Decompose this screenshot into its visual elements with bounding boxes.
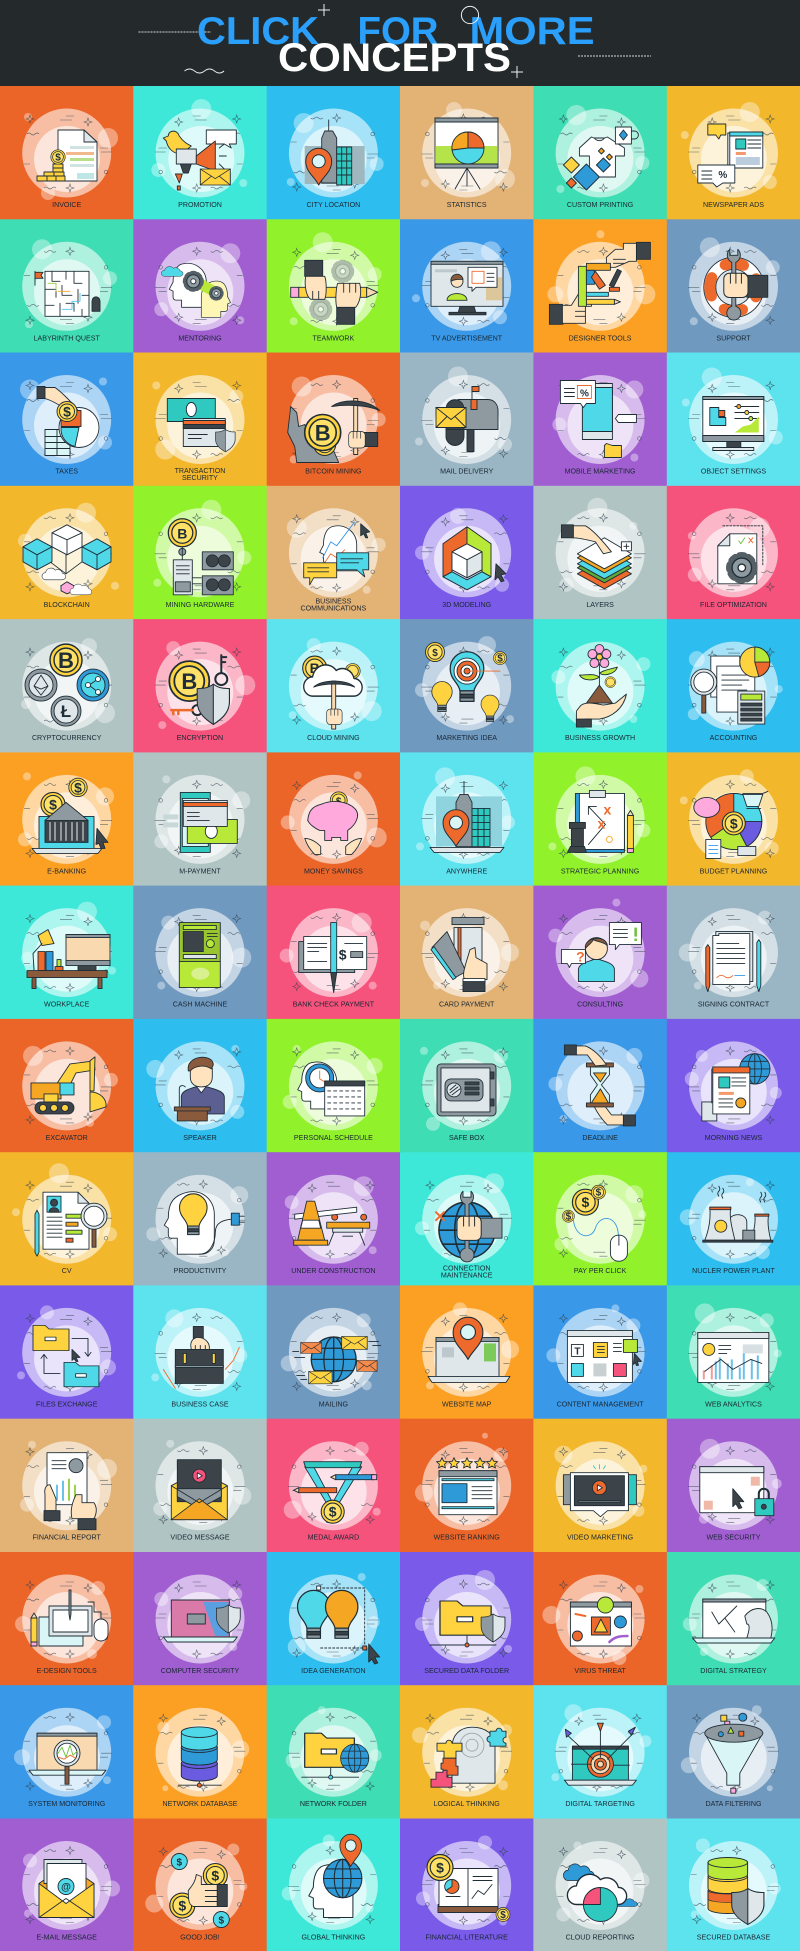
label: WEB SECURITY xyxy=(706,1534,761,1542)
panel: data filtering xyxy=(667,1685,800,1820)
panel: content management xyxy=(533,1285,668,1420)
label: COMPUTER SECURITY xyxy=(161,1667,239,1675)
icon: bank on laptop with coins: $ xyxy=(74,779,82,795)
panel: consulting xyxy=(533,886,668,1021)
panel: deadline xyxy=(533,1019,668,1154)
label: FILES EXCHANGE xyxy=(36,1400,98,1408)
label: VIDEO MARKETING xyxy=(567,1534,633,1542)
icon: mailbox with flag and letter xyxy=(436,386,498,452)
icon: globe, wrench and fist xyxy=(436,1191,502,1262)
label: BUDGET PLANNING xyxy=(700,867,767,875)
icon: open book with charts and coins xyxy=(427,1854,510,1922)
panel: excavator xyxy=(0,1019,135,1154)
panel: pay per click xyxy=(533,1152,668,1287)
panel: web security xyxy=(667,1419,800,1554)
icon: head with puzzle pieces xyxy=(431,1727,506,1787)
label: CONNECTION xyxy=(443,1265,491,1273)
panel: support xyxy=(667,219,800,354)
icon: analytics window xyxy=(698,1332,769,1382)
panel: newspaper ads xyxy=(667,86,800,221)
label: SYSTEM MONITORING xyxy=(28,1800,105,1808)
icon: excavator xyxy=(31,1057,106,1114)
panel: city location xyxy=(267,86,402,221)
panel: budget planning xyxy=(667,752,800,887)
panel: medal award xyxy=(267,1419,402,1554)
label: LOGICAL THINKING xyxy=(434,1800,500,1808)
icon: open book with charts and coins: $ xyxy=(500,1910,506,1921)
icon: thumbs up with coins xyxy=(170,1854,229,1928)
icon: medal with ribbons and pencils: $ xyxy=(329,1504,337,1520)
label: FINANCIAL LITERATURE xyxy=(426,1934,508,1942)
icon: two folders with arrows xyxy=(33,1325,99,1387)
panel: strategic planning xyxy=(533,752,668,887)
icon: hands holding a report xyxy=(44,1453,96,1530)
panel: speaker xyxy=(133,1019,268,1154)
label: FILE OPTIMIZATION xyxy=(700,601,767,609)
label: CARD PAYMENT xyxy=(439,1001,495,1009)
label: VIRUS THREAT xyxy=(574,1667,626,1675)
panel: files exchange xyxy=(0,1285,135,1420)
icon: laptop with plan and chess knight xyxy=(693,1599,775,1643)
icon: newspaper, globe and mug xyxy=(702,1054,770,1121)
panel: website map xyxy=(400,1285,535,1420)
panel: digital strategy xyxy=(667,1552,800,1687)
label: CASH MACHINE xyxy=(173,1001,227,1009)
panel: idea generation xyxy=(267,1552,402,1687)
label: WORKPLACE xyxy=(44,1001,90,1009)
icon: hand with bank cards xyxy=(431,918,487,992)
icon: file with gear xyxy=(718,526,763,584)
title: click for more: FOR xyxy=(358,10,438,53)
icon: envelope with e-mail letter: @ xyxy=(61,1882,71,1893)
label: NEWSPAPER ADS xyxy=(703,201,764,209)
panel: signing contract xyxy=(667,886,800,1021)
icon: bitcoin, keys and shield: B xyxy=(181,669,197,694)
panel: designer tools xyxy=(533,219,668,354)
label: CRYPTOCURRENCY xyxy=(32,734,102,742)
icon: laptop with shield xyxy=(163,1600,240,1642)
label: CLOUD REPORTING xyxy=(566,1934,635,1942)
icon: contract with pens xyxy=(706,932,761,992)
icon: monitor with presenter and bubble xyxy=(431,261,503,315)
panel: mail delivery xyxy=(400,352,535,488)
label: PROMOTION xyxy=(178,201,222,209)
label: MOBILE MARKETING xyxy=(565,468,636,476)
icon: newspaper, percent card and bubble: % xyxy=(718,170,727,181)
label: PERSONAL SCHEDULE xyxy=(294,1134,373,1142)
icon: hand stacking layers xyxy=(561,525,631,589)
icon: hands with design tools xyxy=(549,242,650,324)
icon: stacked database cylinders xyxy=(178,1727,221,1787)
label: DIGITAL TARGETING xyxy=(565,1800,635,1808)
label: ACCOUNTING xyxy=(710,734,757,742)
label: TAXES xyxy=(55,468,78,476)
label: TRANSACTION xyxy=(175,467,225,475)
icon: head with clock and calendar xyxy=(298,1062,365,1116)
label: NETWORK FOLDER xyxy=(300,1800,367,1808)
title: click for more: CLICK xyxy=(197,10,319,53)
panel: money savings xyxy=(267,752,402,887)
panel: virus threat xyxy=(533,1552,668,1687)
icon: globe with envelopes xyxy=(293,1336,381,1384)
icon: invoice document and coins: $ xyxy=(55,152,61,164)
icon: monitoring screen and magnifier xyxy=(29,1733,106,1784)
icon: bill, bank card and shield xyxy=(167,398,235,452)
panel: financial report xyxy=(0,1419,135,1554)
panel: bitcoin mining xyxy=(267,352,402,488)
panel: accounting xyxy=(667,619,800,754)
panel: e-banking xyxy=(0,752,135,887)
panel: good job xyxy=(133,1818,268,1951)
label: PAY PER CLICK xyxy=(574,1267,627,1275)
title: click for more: MORE xyxy=(470,10,594,53)
panel: business communications xyxy=(267,486,402,621)
icon: phone, card and cash xyxy=(163,792,237,852)
panel: promotion xyxy=(133,86,268,221)
title: click for more xyxy=(197,10,594,53)
label: DATA FILTERING xyxy=(706,1800,761,1808)
label: LAYERS xyxy=(586,601,614,609)
icon: clipboard with rook and pencil: x xyxy=(598,815,606,831)
icon: bank on laptop with coins: $ xyxy=(49,796,57,812)
label: SECURED DATA FOLDER xyxy=(424,1667,509,1675)
icon: bitcoin coin, tower and GPUs: B xyxy=(177,525,187,541)
panel: mobile marketing xyxy=(533,352,668,488)
icon: hand with growing flower xyxy=(576,645,626,727)
label: PRODUCTIVITY xyxy=(174,1267,227,1275)
label: ANYWHERE xyxy=(446,867,487,875)
icon: thumbs up with coins: $ xyxy=(177,1858,183,1868)
panel: morning news xyxy=(667,1019,800,1154)
icon: consultant with speech bubbles: ? xyxy=(576,949,585,965)
panel: cv xyxy=(0,1152,135,1287)
icon: bank on laptop with coins xyxy=(32,778,108,853)
panel: personal schedule xyxy=(267,1019,402,1154)
icon: city buildings and location pin xyxy=(305,120,365,185)
label: WEBSITE MAP xyxy=(442,1400,492,1408)
label: GLOBAL THINKING xyxy=(301,1934,365,1942)
panel: 3d modeling xyxy=(400,486,535,621)
icon: website window with five stars xyxy=(436,1458,498,1515)
label: MAILING xyxy=(319,1400,348,1408)
icon: open book with charts and coins: $ xyxy=(436,1860,444,1876)
panel: cloud mining xyxy=(267,619,402,754)
label: MARKETING IDEA xyxy=(436,734,497,742)
icon: map on laptop with pin xyxy=(428,1317,510,1382)
label: NUCLER POWER PLANT xyxy=(692,1267,776,1275)
panel: encryption xyxy=(133,619,268,754)
icon: two heads with gears xyxy=(161,263,231,317)
icon: four cryptocurrency coins: B xyxy=(58,648,74,673)
icon: coins and computer mouse xyxy=(562,1185,627,1261)
panel: video marketing xyxy=(533,1419,668,1554)
icon: rock, bitcoin and pickaxe: B xyxy=(315,420,331,446)
label: TEAMWORK xyxy=(313,334,355,342)
icon: target on laptop with arrows xyxy=(564,1723,636,1785)
panel: taxes xyxy=(0,352,135,488)
panel: blockchain xyxy=(0,486,135,621)
label: FINANCIAL REPORT xyxy=(33,1534,101,1542)
icon: clipboard with rook and pencil: x xyxy=(604,801,612,817)
label: UNDER CONSTRUCTION xyxy=(291,1267,376,1275)
label: WEBSITE RANKING xyxy=(434,1534,500,1542)
label: LABYRINTH QUEST xyxy=(34,334,100,342)
icon: clouds with pie chart xyxy=(563,1864,637,1922)
label: E-BANKING xyxy=(47,867,86,875)
panel: object settings xyxy=(667,352,800,488)
icon: bird, megaphone, envelope, speech bubble xyxy=(163,130,236,190)
panel: cloud reporting xyxy=(533,1818,668,1951)
label: CITY LOCATION xyxy=(307,201,360,209)
label: OBJECT SETTINGS xyxy=(701,468,766,476)
icon: head, globe and pin xyxy=(309,1834,362,1918)
label: MORNING NEWS xyxy=(705,1134,763,1142)
panel: business growth xyxy=(533,619,668,754)
label: BANK CHECK PAYMENT xyxy=(293,1001,375,1009)
icon: coins and computer mouse: $ xyxy=(596,1188,602,1199)
icon: hands holding hourglass xyxy=(564,1045,635,1126)
panel: statistics xyxy=(400,86,535,221)
label: E-DESIGN TOOLS xyxy=(37,1667,97,1675)
label: E-MAIL MESSAGE xyxy=(36,1934,97,1942)
panel: layers xyxy=(533,486,668,621)
panel: custom printing xyxy=(533,86,668,221)
label: SPEAKER xyxy=(183,1134,217,1142)
label line 2: MAINTENANCE xyxy=(441,1272,493,1280)
icon: ATM machine xyxy=(179,923,220,988)
panel: system monitoring xyxy=(0,1685,135,1820)
icon: desk with computer, lamp and binders xyxy=(27,930,110,989)
label: SIGNING CONTRACT xyxy=(698,1001,770,1009)
label: DIGITAL STRATEGY xyxy=(700,1667,767,1675)
panel: card payment xyxy=(400,886,535,1021)
icon: folder with shield on network xyxy=(430,1601,505,1647)
panel: cryptocurrency xyxy=(0,619,135,754)
label: BITCOIN MINING xyxy=(305,468,362,476)
icon: maze with flag and figure xyxy=(35,271,100,316)
panel: safe box xyxy=(400,1019,535,1154)
icon: four cryptocurrency coins xyxy=(25,644,109,726)
panel: mining hardware xyxy=(133,486,268,621)
label: 3D MODELING xyxy=(442,601,491,609)
icon: two bulbs with selection frame and cursor xyxy=(298,1586,380,1664)
panel: file optimization xyxy=(667,486,800,621)
panel: cash machine xyxy=(133,886,268,1021)
panel: connection maintenance xyxy=(400,1152,535,1287)
panel: financial literature xyxy=(400,1818,535,1951)
icon: check with fountain pen: $ xyxy=(339,947,347,963)
panel: m-payment xyxy=(133,752,268,887)
label: GOOD JOB! xyxy=(180,1934,220,1942)
label: MENTORING xyxy=(178,334,222,342)
icon: hand carrying briefcase xyxy=(163,1326,239,1388)
header decoration: dashed lines xyxy=(138,32,651,56)
icon: light bulbs, target and coins: $ xyxy=(432,648,438,659)
panel: secured data folder xyxy=(400,1552,535,1687)
icon: folder and globe on network xyxy=(302,1733,369,1779)
icon: coins and computer mouse: $ xyxy=(566,1212,572,1223)
panel: secured database xyxy=(667,1818,800,1951)
panel: productivity xyxy=(133,1152,268,1287)
icon: cubes, clouds and nodes xyxy=(23,525,111,595)
label: STRATEGIC PLANNING xyxy=(561,867,639,875)
icon: video player monitor xyxy=(563,1465,636,1517)
icon: safe xyxy=(437,1064,496,1116)
label: SUPPORT xyxy=(716,334,751,342)
icon: pie chart, coin, piggy and cart: $ xyxy=(730,815,738,831)
icon: t-shirt, mug and diamonds xyxy=(563,127,638,190)
panel: anywhere xyxy=(400,752,535,887)
icon: browser window with cursor and lock xyxy=(700,1467,774,1516)
icon: two hands holding a pencil xyxy=(291,260,378,324)
header decorations xyxy=(184,4,523,78)
label: DESIGNER TOOLS xyxy=(569,334,632,342)
icon: head with light bulb and plug xyxy=(164,1192,244,1254)
panel: mailing xyxy=(267,1285,402,1420)
panel: business case xyxy=(133,1285,268,1420)
label: M-PAYMENT xyxy=(179,867,221,875)
panel: nucler power plant xyxy=(667,1152,800,1287)
panel: network folder xyxy=(267,1685,402,1820)
header band xyxy=(0,0,800,87)
icon: light bulbs, target and coins: $ xyxy=(497,654,503,665)
label: SECURED DATABASE xyxy=(697,1934,770,1942)
icon: window with virus, warning and bugs xyxy=(570,1597,631,1646)
panel: transaction security xyxy=(133,352,268,488)
label: MEDAL AWARD xyxy=(308,1534,359,1542)
icon: database with shield xyxy=(708,1858,764,1924)
icon: nuclear power plant xyxy=(703,1186,773,1242)
label: MAIL DELIVERY xyxy=(440,468,494,476)
icon: envelope with video xyxy=(171,1460,227,1520)
label: SAFE BOX xyxy=(449,1134,485,1142)
icon: hexagon with 3d cube xyxy=(443,527,506,590)
label: MINING HARDWARE xyxy=(166,601,235,609)
icon: light bulbs, target and coins xyxy=(426,643,506,722)
icon: speaker at podium xyxy=(174,1057,224,1121)
label: VIDEO MESSAGE xyxy=(170,1534,230,1542)
icon: papers, pie, magnifier and calculator xyxy=(691,647,770,724)
panel: digital targeting xyxy=(533,1685,668,1820)
icon: clipboard with rook and pencil xyxy=(567,790,633,852)
icon: thumbs up with coins: $ xyxy=(219,1916,225,1926)
icon: thumbs up with coins: $ xyxy=(211,1868,219,1884)
label: NETWORK DATABASE xyxy=(162,1800,238,1808)
icon: coins and computer mouse: $ xyxy=(582,1194,590,1210)
panel: invoice xyxy=(0,86,135,221)
label: MONEY SAVINGS xyxy=(304,867,363,875)
panel: marketing idea xyxy=(400,619,535,754)
icon: four cryptocurrency coins: Ł xyxy=(61,702,71,721)
label: WEB ANALYTICS xyxy=(705,1400,762,1408)
label: DEADLINE xyxy=(582,1134,618,1142)
panel: bank check payment xyxy=(267,886,402,1021)
icon: cloud, coins and pickaxe: B xyxy=(310,660,320,676)
panel: global thinking xyxy=(267,1818,402,1951)
label: CUSTOM PRINTING xyxy=(567,201,633,209)
panel: computer security xyxy=(133,1552,268,1687)
panel: mentoring xyxy=(133,219,268,354)
icon: smartphone with speech bubbles: % xyxy=(580,388,589,400)
label: EXCAVATOR xyxy=(46,1134,88,1142)
icon: hand with coin, pie and table: $ xyxy=(63,404,71,420)
title: concepts: CONCEPTS xyxy=(278,36,511,80)
panel: e-design tools xyxy=(0,1552,135,1687)
label line 2: COMMUNICATIONS xyxy=(301,605,367,613)
label: INVOICE xyxy=(52,201,82,209)
label line 2: SECURITY xyxy=(182,474,218,482)
icon: lifebuoy, wrench and fist xyxy=(704,249,768,320)
icon: thumbs up with coins: $ xyxy=(178,1898,186,1914)
icon: design tablet, pen, mouse and pencil xyxy=(31,1590,108,1646)
label: BLOCKCHAIN xyxy=(44,601,90,609)
panel: e-mail message xyxy=(0,1818,135,1951)
panel: web analytics xyxy=(667,1285,800,1420)
panel: website ranking xyxy=(400,1419,535,1554)
icon: monitor with settings sliders xyxy=(703,396,764,450)
label: CONTENT MANAGEMENT xyxy=(557,1400,644,1408)
label: BUSINESS GROWTH xyxy=(565,734,635,742)
label: BUSINESS xyxy=(315,597,352,605)
panel: workplace xyxy=(0,886,135,1021)
label: ENCRYPTION xyxy=(177,734,223,742)
panel: network database xyxy=(133,1685,268,1820)
label: BUSINESS CASE xyxy=(171,1400,229,1408)
icon: piggy bank with hands: $ xyxy=(336,796,342,807)
label: CLOUD MINING xyxy=(307,734,360,742)
icon: head with chart and speech bubbles xyxy=(304,522,370,585)
panel: logical thinking xyxy=(400,1685,535,1820)
icon: presentation board with pie chart xyxy=(435,118,498,189)
panel: tv advertisement xyxy=(400,219,535,354)
icon: traffic cone and barrier xyxy=(294,1201,370,1245)
panel: under construction xyxy=(267,1152,402,1287)
panel: teamwork xyxy=(267,219,402,354)
panel: video message xyxy=(133,1419,268,1554)
label: CV xyxy=(62,1267,72,1275)
label: CONSULTING xyxy=(577,1001,623,1009)
label: TV ADVERTISEMENT xyxy=(431,334,503,342)
icon: city on laptop with pin xyxy=(430,781,504,852)
label: STATISTICS xyxy=(447,201,487,209)
icon: resume with magnifier and pen xyxy=(35,1192,107,1256)
panel: labyrinth quest xyxy=(0,219,135,354)
icon: content window with items: T xyxy=(574,1346,580,1357)
label: IDEA GENERATION xyxy=(301,1667,366,1675)
icon: funnel with shapes xyxy=(705,1713,763,1793)
